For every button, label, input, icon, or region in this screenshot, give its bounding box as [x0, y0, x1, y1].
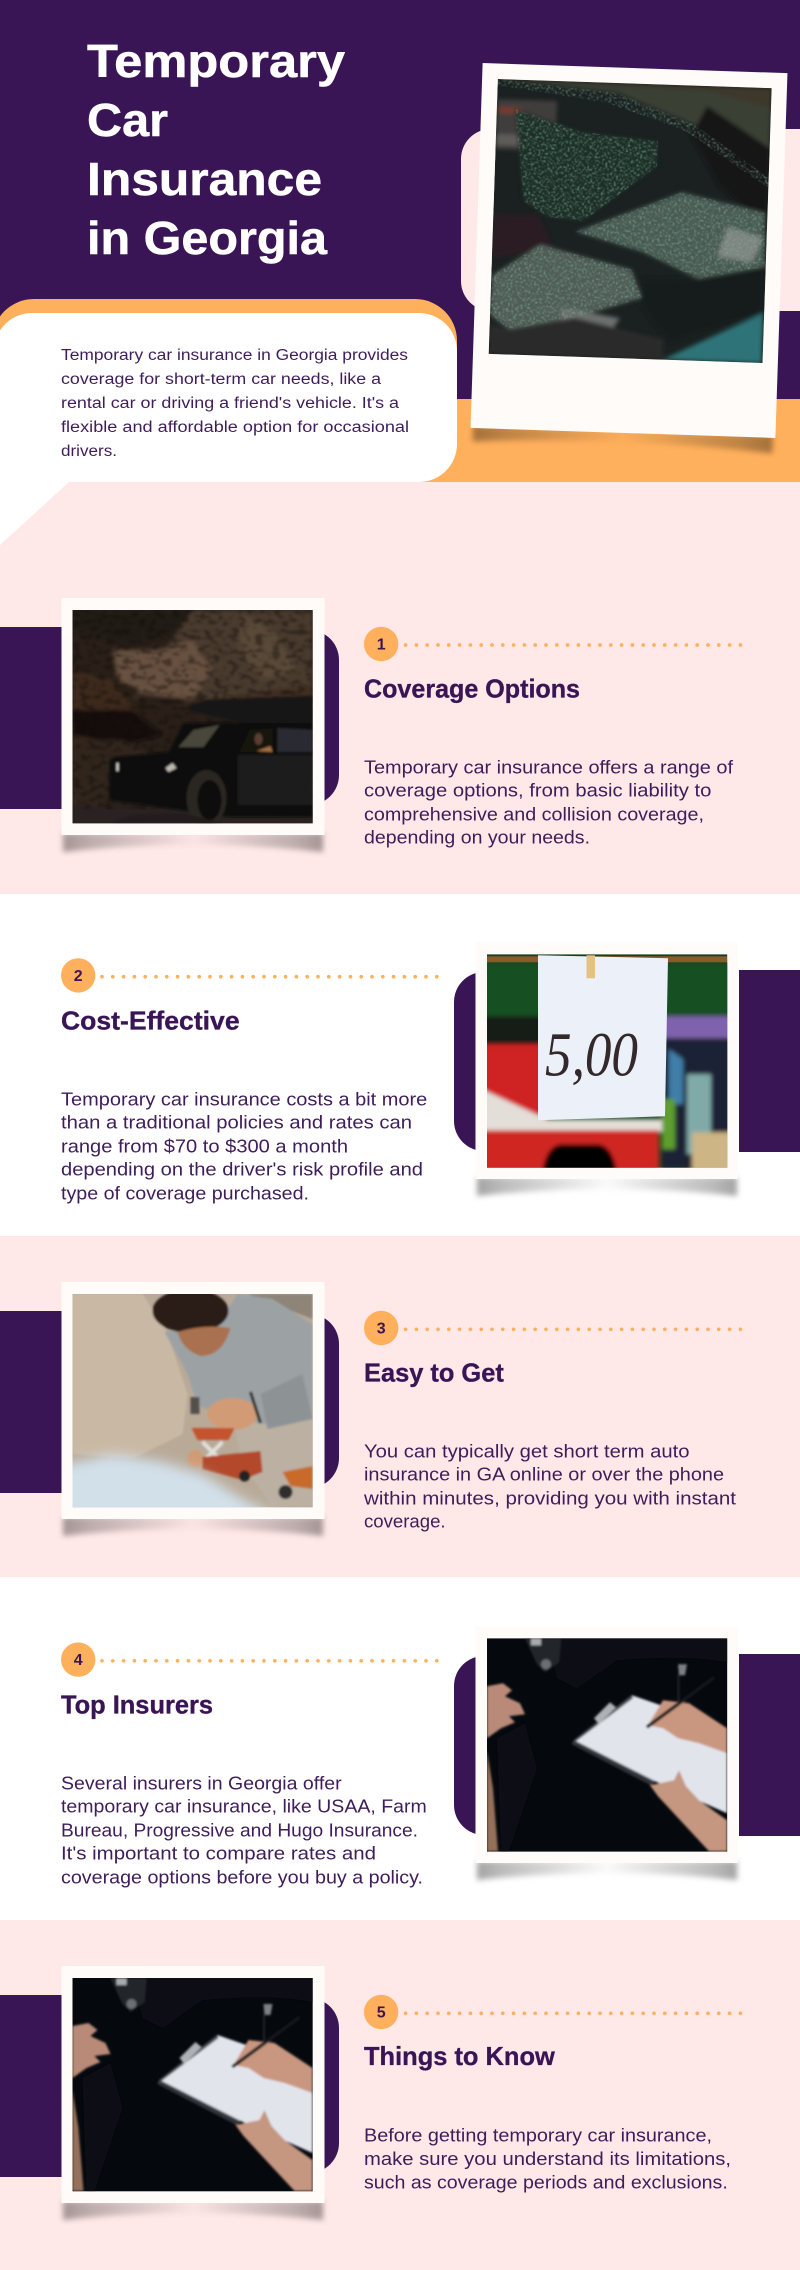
page title: Temporary — [87, 35, 345, 87]
body text: coverage options, from basic liability to — [364, 781, 711, 801]
white section background — [0, 1577, 800, 1920]
pink section background — [0, 1236, 800, 1577]
left purple block — [0, 1311, 62, 1493]
orange band — [420, 399, 800, 482]
body text: Bureau, Progressive and Hugo Insurance. — [61, 1820, 418, 1840]
body text: depending on the driver's risk profile and — [61, 1160, 423, 1180]
photo: signing a clipboard in a car — [487, 1638, 727, 1852]
dotted line — [406, 1327, 746, 1331]
white speech bubble — [0, 313, 457, 545]
section 1: coverage options — [0, 598, 746, 852]
polaroid frame — [471, 63, 787, 438]
handwritten price: 5,00 — [545, 1021, 638, 1089]
heading: Coverage Options — [364, 674, 580, 704]
intro paragraph: Temporary car insurance in Georgia provides — [61, 347, 408, 364]
body text: Before getting temporary car insurance, — [364, 2126, 712, 2146]
heading: Things to Know — [364, 2041, 556, 2071]
body text: Several insurers in Georgia offer — [61, 1773, 342, 1793]
body text: temporary car insurance, like USAA, Farm — [61, 1797, 427, 1817]
rounded purple block — [200, 630, 339, 805]
body text: depending on your needs. — [364, 828, 590, 848]
section 2: cost-effective — [61, 954, 800, 1204]
body text: coverage options before you buy a policy. — [61, 1867, 423, 1887]
page title — [87, 35, 345, 264]
photo: child playing with toy fire truck — [72, 1294, 313, 1508]
shattered glass photo — [489, 79, 772, 363]
number badge 2 — [61, 958, 95, 993]
polaroid shadow — [63, 2201, 323, 2220]
orange bubble backing — [0, 299, 457, 482]
body text: Temporary car insurance offers a range of — [364, 757, 734, 777]
body text — [364, 2126, 731, 2193]
white section background — [0, 894, 800, 1236]
rounded purple block — [200, 1314, 339, 1488]
body text: It's important to compare rates and — [61, 1844, 376, 1864]
number badge 1 — [364, 627, 398, 661]
polaroid shadow — [63, 1517, 323, 1536]
body text: range from $70 to $300 a month — [61, 1136, 348, 1156]
pink section background — [0, 1920, 800, 2270]
polaroid shadow — [473, 425, 773, 453]
body text — [61, 1089, 427, 1203]
page title: Insurance — [87, 153, 322, 205]
number badge 4: 4 — [74, 1652, 83, 1669]
number badge 5 — [364, 1995, 398, 2029]
body text — [364, 757, 734, 848]
polaroid frame — [62, 1966, 324, 2203]
polaroid frame — [62, 598, 324, 835]
section 5: things to know — [0, 1920, 800, 2270]
body text — [61, 1773, 427, 1887]
body text: such as coverage periods and exclusions. — [364, 2173, 728, 2193]
heading: Cost-Effective — [61, 1005, 240, 1035]
body text: You can typically get short term auto — [364, 1441, 690, 1461]
pink section start with speech tail — [0, 482, 800, 894]
number badge 3 — [364, 1311, 398, 1345]
header purple background — [0, 0, 800, 482]
rounded purple block — [454, 972, 593, 1151]
intro paragraph: drivers. — [61, 443, 117, 460]
rounded purple block — [454, 1656, 593, 1835]
section 4: top insurers — [61, 1638, 800, 1888]
photo: handwritten price sign — [482, 954, 732, 1172]
dotted line — [102, 1659, 441, 1663]
polaroid frame — [476, 942, 738, 1179]
dotted line — [102, 975, 441, 979]
photo: black SUV by rock wall — [72, 610, 313, 826]
body text: comprehensive and collision coverage, — [364, 805, 704, 825]
body text: within minutes, providing you with instant — [363, 1489, 736, 1509]
left purple block — [0, 627, 62, 809]
header panel — [0, 0, 800, 894]
body text: insurance in GA online or over the phone — [364, 1465, 724, 1485]
number badge 4 — [61, 1642, 95, 1677]
right purple block — [739, 970, 800, 1152]
polaroid shadow — [477, 1861, 737, 1880]
intro paragraph: rental car or driving a friend's vehicle. It's a — [61, 395, 399, 412]
section 3: easy to get — [0, 1236, 800, 1577]
body text: make sure you understand its limitations, — [364, 2149, 731, 2169]
polaroid shadow — [477, 1177, 737, 1196]
body text: than a traditional policies and rates can — [61, 1113, 412, 1133]
body text: coverage. — [364, 1512, 446, 1532]
number badge 5: 5 — [377, 2004, 386, 2022]
body text: type of coverage purchased. — [61, 1183, 309, 1203]
polaroid shadow — [63, 833, 323, 852]
intro paragraph: flexible and affordable option for occasional — [61, 419, 409, 436]
header polaroid with shattered car glass — [470, 63, 787, 453]
photo: signing a clipboard in a car — [72, 1978, 313, 2191]
number badge 2: 2 — [74, 968, 83, 985]
heading: Top Insurers — [61, 1689, 213, 1719]
left purple block — [0, 1995, 62, 2177]
right purple block — [739, 1654, 800, 1836]
number badge 1: 1 — [377, 636, 386, 654]
rounded purple block — [200, 1998, 339, 2173]
polaroid frame — [476, 1626, 738, 1863]
intro paragraph — [61, 347, 409, 460]
price sign paper — [538, 955, 668, 1120]
body text — [363, 1441, 736, 1532]
pink accent block — [461, 129, 800, 311]
heading: Easy to Get — [364, 1358, 504, 1388]
polaroid frame — [62, 1282, 324, 1519]
dotted line — [406, 643, 746, 647]
intro paragraph: coverage for short-term car needs, like a — [61, 371, 381, 388]
page title: in Georgia — [87, 212, 327, 264]
body text: Temporary car insurance costs a bit more — [61, 1089, 427, 1109]
number badge 3: 3 — [377, 1320, 386, 1338]
dotted line — [406, 2011, 746, 2015]
page title: Car — [87, 94, 168, 146]
